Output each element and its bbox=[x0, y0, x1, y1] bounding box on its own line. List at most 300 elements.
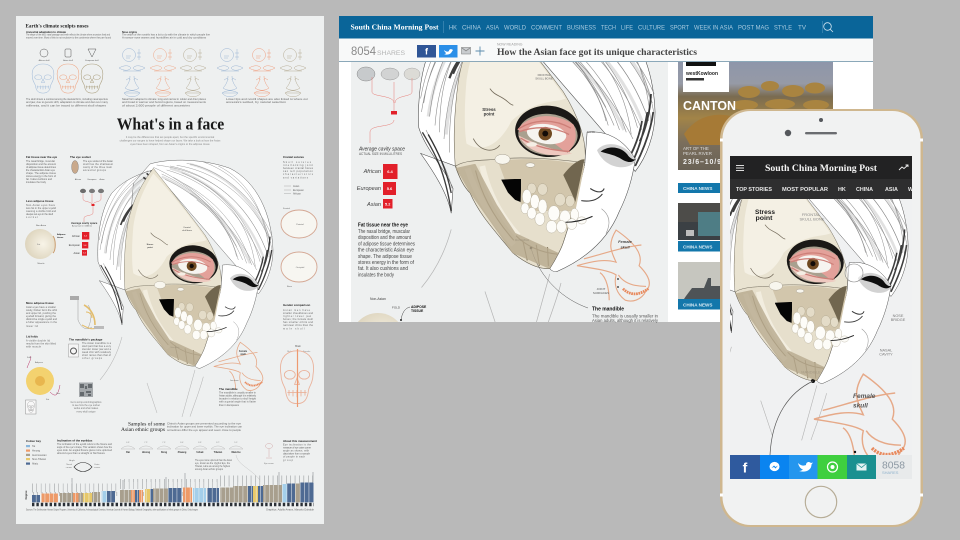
icon: menu bbox=[736, 166, 744, 170]
diagram: female skull (phone) bbox=[814, 374, 905, 464]
diagram: non-Asian eye (desktop): Non-Asian bbox=[370, 297, 386, 301]
jaw shading: phone bbox=[735, 290, 825, 381]
diagram: non-Asian eye (desktop): ADIPOSE bbox=[411, 305, 427, 309]
text: ancestral adaptation: moved over time. Most of this is not exclusive to the continents where they are found bbox=[26, 36, 112, 40]
text: nose origins: A narrow nose warms and humidifies air in cold and dry conditions bbox=[122, 36, 207, 40]
text and icon: the mandible box: The mandible's package bbox=[69, 338, 103, 342]
row: eye shapes by ethnic group: 6.3° bbox=[126, 442, 130, 444]
diagram: female skull (desktop): Female bbox=[618, 239, 633, 244]
text: the mandible: The mandible bbox=[219, 387, 238, 391]
text: lid folds: A visible double lid bbox=[26, 340, 51, 342]
heading: samples: Samples of some bbox=[128, 420, 166, 428]
text: samples intro: China's Asian groups are presented according to the eye bbox=[167, 422, 242, 426]
text: about measurements: measure of eye outer corner bbox=[283, 446, 311, 450]
text: the mandible: than in Europeans bbox=[219, 404, 240, 407]
text: nose captions: Nasal form adapted to climate: long and narrow in colder and drier places bbox=[122, 98, 207, 101]
diagram: skull sutures top: Parietal bbox=[296, 223, 304, 226]
illustration: jaw and teeth bbox=[125, 281, 227, 366]
row: eye shapes by ethnic group bbox=[121, 442, 243, 454]
icons: head shapes bbox=[39, 49, 99, 62]
text and diagram: eyelid inclination: corner bbox=[66, 466, 72, 469]
text: cranial sutures: and variations bbox=[283, 176, 309, 180]
navigation: WORLD bbox=[504, 24, 526, 32]
sidebar image: Canton exhibition ad: 23/6–10/9 bbox=[683, 159, 721, 166]
text and diagram: eyelid inclination: corner bbox=[94, 466, 100, 469]
icon: search bbox=[824, 23, 833, 32]
icons: three skulls bbox=[32, 64, 103, 93]
text: less adipose tissue: Non-Asian eyes have bbox=[26, 204, 56, 207]
text: fat tissue: disposition and the amount bbox=[26, 163, 56, 166]
panel: desktop web page bbox=[339, 0, 923, 527]
legend: colour key: Tai bbox=[32, 445, 36, 448]
phone mockup bbox=[703, 109, 923, 527]
chart: average cavity space bbox=[69, 221, 98, 256]
mandible leader (phone) bbox=[770, 379, 815, 455]
text: nose captions: and broad in warmer and humid regions, based on measurements bbox=[122, 101, 207, 104]
text: nose captions: ancestors settled, by natural selection bbox=[226, 101, 287, 104]
diagram: female skull (desktop): SURFACES bbox=[593, 291, 609, 295]
diagram: non-Asian eyeball: Muscle bbox=[38, 263, 45, 265]
text and icon: the mandible box: other groups bbox=[82, 357, 103, 360]
intro text: challenges our ranges to have helped shape our faces. We take a look at how the Asian bbox=[120, 138, 221, 142]
text: fat tissue: the characteristic Asian eye bbox=[26, 169, 56, 172]
diagram: non-Asian eyeball: Adipose bbox=[57, 233, 66, 236]
face labels (desktop): MANDIBLE bbox=[515, 238, 529, 242]
phone navigation: CHINA bbox=[856, 187, 873, 193]
text: cranial sutures: Skull sutures bbox=[283, 161, 312, 164]
text: about measurements: Eye inclination is the bbox=[283, 444, 312, 446]
intro text: It may be the differences that set people apart, but the specific environmental bbox=[126, 135, 215, 139]
icons: head shapes: African skull bbox=[39, 59, 50, 62]
text: fat tissue (desktop): of adipose tissue determines bbox=[358, 242, 415, 248]
face labels (phone): MANDIBLE bbox=[801, 370, 821, 374]
chart: average cavity space (desktop): 5.2 bbox=[385, 202, 390, 206]
diagram: yellow adipose eye bbox=[26, 356, 61, 401]
chart: average cavity space (desktop): 5.6 bbox=[387, 186, 393, 191]
text: lid folds: results from the skin lifted bbox=[26, 342, 57, 346]
text: about measurements: data taken from a sample bbox=[283, 452, 311, 456]
navigation: TECH bbox=[601, 24, 616, 32]
text: callout: among Asian ethnic groups bbox=[195, 468, 224, 471]
phone navigation: TOP STORIES bbox=[736, 187, 772, 193]
text: about measurements bbox=[264, 439, 317, 465]
chart: average cavity space (desktop) bbox=[357, 146, 405, 208]
sidebar image: warship bbox=[678, 262, 724, 299]
diagram: three eye sockets bbox=[75, 178, 105, 222]
row: eye shapes by ethnic group: 7.2° bbox=[144, 442, 148, 444]
row: eye shapes by ethnic group: Dai bbox=[126, 451, 130, 454]
label: China news 1: CHINA NEWS bbox=[683, 186, 712, 191]
chart: average cavity space: Average cavity space bbox=[71, 221, 98, 225]
text: more adipose tissue: cavity, thicker fat in the orbit bbox=[26, 309, 57, 312]
text: more adipose tissue: eyeball forward, giving the bbox=[26, 315, 57, 318]
phone screen bbox=[730, 199, 912, 455]
share: email bbox=[847, 455, 876, 479]
share: facebook bbox=[730, 455, 760, 479]
magnifier circle bbox=[845, 264, 863, 282]
text and icon: eye socket: ancestral groups bbox=[83, 169, 107, 172]
text: about measurements: of people in each bbox=[283, 456, 306, 458]
text: skull caption: millennia, and it can be traced to different skull shapes bbox=[26, 104, 107, 108]
face labels (desktop): NOSE bbox=[587, 130, 595, 134]
navigation: ASIA bbox=[486, 24, 500, 32]
text and diagram: eyelid inclination bbox=[57, 438, 113, 472]
share bar bbox=[339, 38, 873, 62]
icon: plus bbox=[476, 46, 484, 56]
diagram: skull sutures bottom bbox=[281, 252, 317, 288]
navigation: CHINA bbox=[462, 24, 482, 32]
diagram: Asian eye cross-section bbox=[70, 296, 104, 329]
text: fat tissue (desktop) bbox=[358, 222, 415, 278]
text and diagram: eyelid inclination: eyes look. An angled fissure gives more upturned bbox=[57, 449, 113, 452]
diagram: yellow adipose eye: Fold bbox=[27, 357, 32, 359]
chart: average cavity space (desktop): African bbox=[363, 169, 381, 175]
text: callout: Tibetan, Lahu are among the highest bbox=[195, 465, 230, 468]
text: cranial sutures: Cranial sutures bbox=[283, 155, 304, 159]
chart: average cavity space: African bbox=[72, 234, 81, 238]
legend: colour key bbox=[26, 439, 47, 466]
row: eye shapes by ethnic group: Zhuang bbox=[178, 451, 187, 454]
legend: colour key: Sino-Tibetan bbox=[32, 458, 47, 461]
text and icon: the mandible box bbox=[68, 338, 112, 360]
diagram: gender skull front: Brain bbox=[295, 345, 301, 348]
diagram: non-Asian eye (desktop) bbox=[358, 298, 426, 322]
text: less adipose tissue: less fat in the upper eyelid bbox=[26, 207, 57, 210]
diagram: gender skull front bbox=[280, 345, 314, 407]
labels on face: skull bone bbox=[182, 230, 193, 232]
phone header: South China Morning Post bbox=[765, 163, 877, 173]
diagram: female skull: skull bbox=[240, 353, 246, 356]
text: ancestral adaptation bbox=[26, 30, 112, 40]
illustration: half-skull face bbox=[98, 160, 273, 417]
text: fat tissue (desktop): fat. It also cushions and bbox=[358, 266, 408, 272]
text: fat tissue: insulates the body bbox=[26, 181, 47, 184]
illustration: half-skull face (phone) bbox=[730, 199, 908, 440]
text: fat tissue: The nasal bridge, muscular bbox=[26, 160, 55, 163]
text: cranial sutures bbox=[283, 155, 314, 196]
share bar: 8054 bbox=[351, 46, 377, 58]
diagram: yellow adipose eye: Skin bbox=[56, 393, 61, 395]
label: China news 2: CHINA NEWS bbox=[683, 244, 712, 250]
diagram: skull sutures bottom: Base bbox=[287, 286, 293, 288]
face labels (phone): FRONTAL bbox=[802, 212, 821, 217]
chart: average cavity space (desktop): European bbox=[357, 186, 381, 192]
panel: print infographic bbox=[16, 16, 324, 524]
text: nose origins: The width of the nostrils has a lot to do with the climate in which people live bbox=[122, 34, 211, 36]
phone sensors bbox=[785, 118, 837, 136]
text and diagram: eyelid inclination: Inclination of the eyelidas bbox=[57, 438, 93, 442]
heading: samples: Asian ethnic groups bbox=[121, 427, 165, 433]
share bar: SHARES bbox=[377, 50, 406, 57]
bar chart: eye inclination by group bbox=[24, 472, 314, 504]
chart: average cavity space: 6.4 bbox=[84, 236, 88, 238]
labels on face: Frontal bbox=[184, 226, 191, 229]
text: skull caption: The skull shows a contrast among the skeletal form, including nasal aperture bbox=[26, 98, 109, 101]
diagram: skull sutures bottom: Occipital bbox=[296, 266, 305, 269]
diagram: non-Asian eyeball: Fat bbox=[37, 243, 41, 246]
icon: trending bbox=[899, 165, 908, 170]
text: gender comparison: Gender comparison bbox=[283, 303, 311, 307]
text and icon: the mandible box: short ramus than that of bbox=[82, 354, 111, 357]
nasal cavity: phone bbox=[775, 302, 792, 323]
text: callout: The eyes more upturned than the Asian bbox=[195, 459, 233, 462]
text: gender comparison: smaller cheekbones and bbox=[283, 312, 314, 315]
whiskers bbox=[32, 481, 314, 494]
row: eye shapes by ethnic group: Tibetan bbox=[214, 451, 223, 454]
diagram: gender skull front: Female bbox=[303, 351, 311, 353]
text and diagram: eyelid inclination: angle of the eye's shape, This variation shows how the bbox=[57, 446, 113, 449]
text: more adipose tissue: and upper lid, pushing the bbox=[26, 312, 57, 315]
diagram: female skull: Jaw bone bbox=[230, 380, 239, 382]
text: QR caption bbox=[71, 401, 102, 414]
text: more adipose tissue: More adipose tissue bbox=[26, 301, 54, 305]
chart: average cavity space: Actual size in millilitres bbox=[72, 224, 92, 228]
face labels (phone) bbox=[755, 209, 906, 374]
text and icon: eye socket: skull has the shallowest bbox=[83, 163, 113, 166]
button: facebook bbox=[417, 45, 436, 58]
title: What's in a face bbox=[117, 114, 225, 134]
text: samples intro bbox=[167, 422, 243, 432]
illustration: jaw and teeth (desktop) bbox=[456, 154, 592, 269]
text: QR caption: works and what makes bbox=[74, 407, 99, 410]
text: ancestral adaptation: The shape of the skull, nasal passage and teeth reflects the climate where ancestors lived and bbox=[26, 34, 110, 36]
phone navigation: MOST POPULAR bbox=[782, 187, 828, 193]
label: China news 1 bbox=[678, 183, 724, 193]
text: more adipose tissue: distinctive single eyelid and bbox=[26, 318, 58, 321]
legend: colour key: Altaic bbox=[32, 462, 39, 466]
illustration: jaw and teeth (phone) bbox=[735, 282, 854, 381]
diagram: female skull (desktop): JOINT bbox=[597, 287, 605, 291]
text and diagram: eyelid inclination: Outer bbox=[94, 463, 100, 466]
diagram: non-Asian eyeball: tissue bbox=[57, 236, 64, 239]
row: eye shapes by ethnic group: 8.7° bbox=[216, 442, 220, 444]
share count bbox=[876, 455, 912, 479]
diagram: non-Asian eye (desktop): FOLD bbox=[392, 306, 401, 310]
row: eye shapes by ethnic group: 9.1° bbox=[234, 442, 238, 444]
mandible leader and text (desktop): The mandible is usually smaller in bbox=[592, 314, 659, 318]
button: twitter bbox=[439, 45, 458, 58]
chart: average cavity space: 5.2 bbox=[83, 253, 87, 255]
text: the mandible: Asian adults, although it is relatively bbox=[219, 394, 257, 398]
text and diagram: eyelid inclination: almond eyes than a straight or flat fissure bbox=[57, 452, 106, 455]
row: eye shapes by ethnic group: Dong bbox=[161, 451, 168, 454]
text: lid folds: Lid folds bbox=[26, 334, 38, 338]
navigation: COMMENT bbox=[531, 24, 562, 32]
text and icon: eye socket: The eye socket bbox=[70, 155, 91, 159]
row: eye shapes by ethnic group: 8.3° bbox=[198, 442, 202, 444]
mandible leader and text (desktop): The mandible bbox=[592, 306, 624, 312]
text: nose captions: of about 2,600 people of different ancestries bbox=[122, 104, 191, 108]
text: more adipose tissue: Asian eyes have a smaller bbox=[26, 306, 56, 309]
text: gender comparison: male skull bbox=[283, 328, 305, 330]
text: footer source: Graphics: Adolfo Arranz, Marcelo Duhalde bbox=[266, 508, 315, 512]
text: QR caption: to see how the eye socket bbox=[72, 404, 100, 407]
button: facebook: f bbox=[425, 46, 429, 56]
text: more adipose tissue bbox=[26, 301, 58, 328]
diagram: three eye sockets: African bbox=[75, 178, 81, 181]
heading: samples bbox=[121, 420, 166, 433]
icons: head shapes: Asian skull bbox=[63, 59, 73, 62]
sidebar image: street scene bbox=[678, 203, 724, 240]
diagram: non-Asian eye (desktop): TISSUE bbox=[411, 309, 424, 313]
navigation: TV bbox=[798, 24, 807, 32]
diagram: female skull (desktop): skull bbox=[620, 244, 630, 250]
site header bbox=[339, 16, 873, 38]
face labels (phone): SKULL BONE bbox=[800, 216, 825, 222]
text: cranial sutures: can tell population bbox=[283, 170, 314, 173]
sidebar image: Canton exhibition ad: ART OF THE bbox=[683, 146, 709, 151]
diagram: skull sutures top bbox=[281, 207, 317, 238]
diagram: non-Asian eyeball bbox=[25, 224, 66, 265]
share: twitter bbox=[789, 455, 818, 479]
text: the mandible: The mandible is usually smaller in bbox=[219, 392, 257, 394]
text: less adipose tissue: socket bbox=[26, 216, 38, 219]
diagram: three eye sockets: European bbox=[88, 179, 96, 181]
face labels (phone): BRIDGE bbox=[891, 318, 906, 322]
text: fat tissue (desktop): insulates the body bbox=[358, 272, 394, 278]
text: fat tissue: shape. The adipose tissue bbox=[26, 172, 57, 175]
ad logo box bbox=[683, 62, 729, 92]
phone header bbox=[730, 156, 912, 179]
labels on face: Stress bbox=[147, 243, 154, 246]
jaw shading: print panel bbox=[125, 288, 202, 366]
text: fat tissue: Fat tissue near the eye bbox=[26, 155, 58, 159]
text and icon: the mandible box: slender lower jaw and a bbox=[82, 348, 112, 351]
text: more adipose tissue: lower lid bbox=[26, 325, 39, 328]
navigation: WEEK IN ASIA bbox=[694, 24, 734, 32]
icons: head shapes: European skull bbox=[85, 60, 99, 62]
diagram: non-Asian eyeball: Non-Asian bbox=[36, 224, 47, 227]
icon: email bbox=[462, 48, 470, 54]
text: nose origins: Nose origins bbox=[122, 30, 137, 34]
QR code bbox=[79, 382, 93, 397]
intro text bbox=[120, 135, 221, 146]
face labels (desktop): Stress bbox=[482, 107, 496, 112]
text: ancestral adaptation: Ancestral adaptation to climate bbox=[26, 30, 66, 34]
navigation: LIFE bbox=[621, 24, 633, 32]
chart: average cavity space (desktop): Asian bbox=[366, 202, 381, 208]
text and icon: the mandible box: weak chin with relatively bbox=[82, 351, 112, 354]
text: less adipose tissue: causing a visible fold and bbox=[26, 210, 57, 213]
navigation: CULTURE bbox=[638, 24, 665, 32]
diagram: yellow adipose eye: Adipose bbox=[35, 361, 44, 364]
labels on face: point bbox=[147, 246, 153, 249]
text and icon: eye socket: The eye socket of the Asian bbox=[83, 160, 114, 163]
share count: SHARES bbox=[882, 470, 899, 475]
mandible leader and text (desktop): Asian adults, although it is relatively bbox=[592, 318, 659, 323]
navigation: POST MAG bbox=[738, 24, 769, 32]
text: gender comparison: bones; the female skull bbox=[283, 318, 313, 321]
nasal cavity: desktop page bbox=[501, 179, 521, 202]
text: nose captions: Lower lips and nostril shapes are also linked to where our bbox=[226, 98, 308, 101]
icon: small skull box bbox=[26, 400, 36, 414]
text: cranial sutures: African bbox=[293, 192, 301, 196]
phone navigation: ASIA bbox=[885, 187, 898, 193]
ad logo box: westKowloon bbox=[685, 71, 718, 77]
face labels (desktop): FRONTAL bbox=[538, 73, 551, 77]
diagram: yellow adipose eye: Fat bbox=[46, 398, 50, 401]
phone body bbox=[720, 109, 923, 527]
navigation bbox=[449, 24, 807, 32]
text: fat tissue bbox=[26, 155, 58, 184]
text: about measurements: group bbox=[283, 459, 294, 462]
phone mockup: skull bbox=[853, 402, 868, 410]
navigation: HK bbox=[449, 24, 458, 32]
share: messenger bbox=[760, 455, 789, 479]
share count: 8058 bbox=[882, 460, 905, 472]
text: fat tissue: of adipose tissue determines bbox=[26, 166, 57, 169]
nasal cavity: print panel bbox=[159, 299, 174, 317]
text: fat tissue (desktop): the characteristic Asian eye bbox=[358, 248, 414, 254]
text: about measurements: angle as shown, with bbox=[283, 450, 310, 452]
text: callout bbox=[195, 455, 260, 480]
chart: average cavity space: European bbox=[69, 243, 81, 247]
diagram: gender skull front: Male bbox=[287, 351, 293, 353]
text: nose captions bbox=[122, 98, 308, 108]
home button bbox=[805, 486, 837, 518]
chart: average cavity space (desktop): 6.4 bbox=[387, 169, 394, 174]
text: samples intro: inclination for upper and lower eyelids. The eye inclination can bbox=[167, 426, 243, 428]
text: skull caption: and jaw, due to genetic drift, adaptation to climate and diet over many bbox=[26, 101, 109, 104]
text and icon: eye socket bbox=[70, 155, 114, 174]
jaw shading: desktop page bbox=[456, 164, 559, 269]
labels on face bbox=[147, 226, 193, 349]
legend: colour key: Hmong bbox=[32, 450, 41, 452]
face labels (phone): point bbox=[756, 215, 773, 222]
face labels (phone): Stress bbox=[755, 209, 775, 216]
face labels (desktop): point bbox=[484, 112, 495, 116]
text: fat tissue: stores energy in the form of bbox=[26, 175, 56, 178]
text: gender comparison bbox=[283, 303, 314, 330]
labels on face: Mandible bbox=[171, 347, 180, 349]
text: cranial sutures: Asian bbox=[293, 185, 300, 188]
face labels (desktop): SKULL BONE bbox=[535, 76, 553, 80]
text: footer source: Sources: The Smithsonian Human Origins Program; University of California; Anthropological Genetics; American Journal of Human Biology; National Geographic; other publications of ethnic groups in China, Getty Images bbox=[26, 508, 199, 512]
heading: climate sculpts noses: Earth's climate sculpts noses bbox=[26, 24, 89, 30]
row: eye shapes by ethnic group: 8.0° bbox=[180, 442, 184, 444]
text: lid folds: with muscle bbox=[26, 346, 42, 348]
diagram: female skull bbox=[214, 342, 263, 390]
text: cranial sutures: European bbox=[293, 189, 304, 192]
diagram: nose origins grid bbox=[119, 48, 306, 97]
chart: average cavity space (desktop): Average cavity space bbox=[358, 146, 405, 152]
text: cranial sutures: characteristics bbox=[283, 173, 314, 176]
text: less adipose tissue bbox=[26, 199, 57, 219]
text: QR caption: every skull unique bbox=[76, 410, 96, 414]
phone navigation: HK bbox=[838, 187, 846, 193]
text: fat tissue: fat. It also cushions and bbox=[26, 178, 53, 181]
text and icon: the mandible box: The Asian mandible is a bbox=[82, 342, 112, 345]
text and icon: the mandible box: skull part that has a very bbox=[82, 345, 112, 348]
chart: average cavity space: Asian bbox=[74, 251, 81, 255]
label: China news 3: CHINA NEWS bbox=[683, 302, 712, 308]
text: fat tissue (desktop): Fat tissue near the eye bbox=[358, 222, 408, 228]
text: samples intro: sometimes differ the eye appear and seem close to people bbox=[167, 429, 242, 432]
eye socket diagrams (desktop) bbox=[357, 67, 420, 143]
text: skull caption bbox=[26, 98, 109, 108]
text: cranial sutures: interlocking joint bbox=[283, 164, 313, 167]
legend: colour key: Austronesian bbox=[32, 454, 47, 457]
phone navigation: W bbox=[908, 187, 914, 193]
face labels (phone): CAVITY bbox=[879, 352, 893, 356]
phone mockup: Female bbox=[853, 393, 876, 400]
ad title: CANTON bbox=[683, 98, 736, 113]
face labels (desktop) bbox=[482, 73, 595, 242]
text: more adipose tissue: a fuller appearance in the bbox=[26, 321, 58, 324]
text: nose origins bbox=[122, 30, 211, 40]
text: about measurements: Eye corner bbox=[264, 463, 274, 465]
text and icon: eye socket: cavity of the three main bbox=[83, 166, 113, 169]
